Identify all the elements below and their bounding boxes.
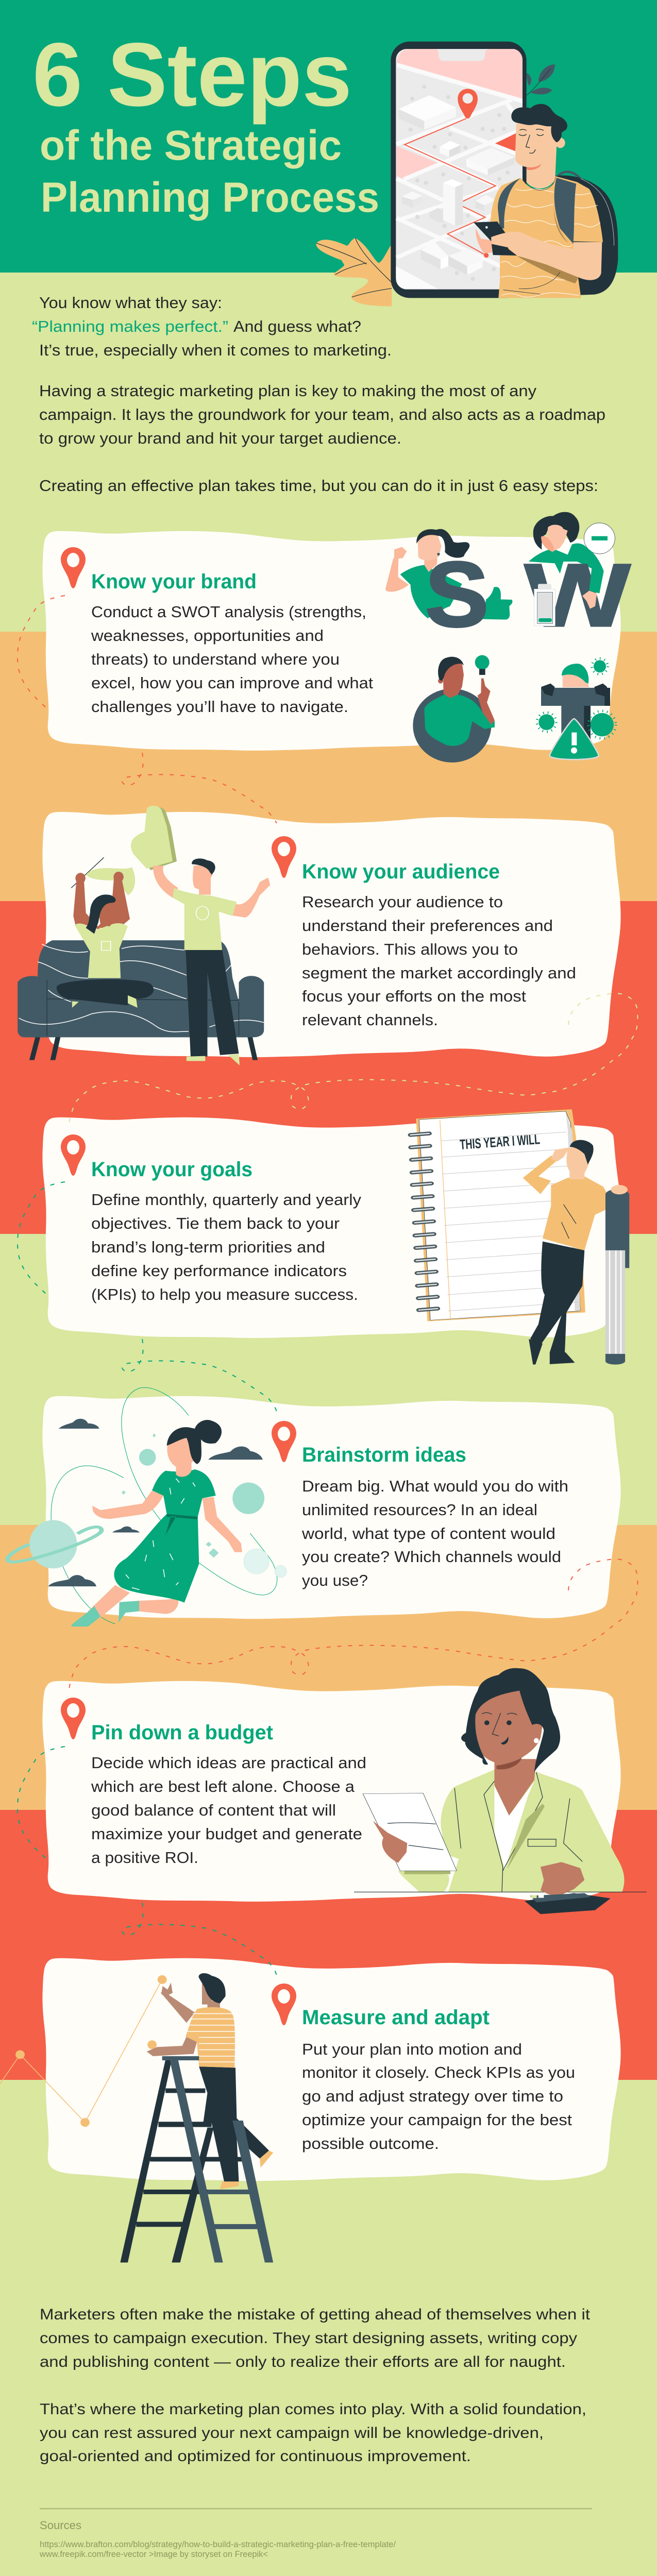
closing text: [40, 2306, 591, 2465]
line chart: [0, 1975, 167, 2127]
icon: map pin: [272, 1421, 296, 1462]
body text: segment the market accordingly and: [302, 964, 576, 982]
man with backpack: [474, 104, 618, 298]
S: strengths: S: [425, 543, 488, 646]
man: [147, 1973, 273, 2189]
body text: weaknesses, opportunities and: [91, 626, 324, 645]
orbits: [51, 1387, 277, 1624]
panel: know your audience: [18, 806, 621, 1065]
heading: Brainstorm ideas: [302, 1444, 466, 1466]
icon: map pin: [61, 547, 86, 588]
sources: www.freepik.com/free-vector >Image by storyset on Freepik<: [39, 2550, 268, 2559]
W: weaknesses: W: [524, 545, 631, 645]
woman's head and hair: [461, 1668, 560, 1816]
body text: Research your audience to: [302, 893, 503, 911]
intro text: to grow your brand and hit your target audience.: [39, 429, 401, 447]
intro text: “Planning makes perfect.”: [32, 317, 228, 335]
man in yellow sweater: [523, 1140, 614, 1364]
icon: map pin: [61, 1698, 86, 1739]
intro text: You know what they say:: [39, 294, 222, 312]
illustration: SWOT letters with people: [385, 512, 631, 762]
closing text: Marketers often make the mistake of getting ahead of themselves when it: [40, 2306, 591, 2323]
icon: map pin: [272, 836, 296, 878]
dashed route: card 4 to card 5: [69, 1559, 637, 1689]
paper in hand: [363, 1793, 457, 1874]
planets and bubbles: [8, 1433, 287, 1578]
illustration: woman with paper and calculator: [354, 1668, 647, 1914]
body text: behaviors. This allows you to: [302, 940, 518, 958]
dashed route: card 3 to card 4: [122, 1339, 277, 1412]
body text: focus your efforts on the most: [302, 987, 526, 1005]
T: threats: [537, 658, 616, 759]
O: opportunities: [413, 655, 495, 762]
icon: phone: [391, 42, 527, 298]
W: weaknesses: [524, 512, 631, 645]
intro text: Having a strategic marketing plan is key to making the most of any: [39, 382, 537, 400]
card background: [42, 1958, 621, 2181]
body text: understand their preferences and: [302, 917, 553, 935]
title: 6 Steps: [32, 25, 352, 125]
body text: [91, 1754, 366, 1867]
panel: know your brand: [42, 512, 631, 762]
heading: Pin down a budget: [91, 1721, 273, 1744]
body text: relevant channels.: [302, 1011, 438, 1029]
jacket and shirt: [398, 1770, 625, 1892]
heading: Measure and adapt: [302, 2006, 490, 2029]
illustration: woman floating in space: [8, 1387, 287, 1626]
heading: Know your goals: [91, 1158, 252, 1181]
heading: Know your audience: [302, 860, 500, 883]
notebook heading text: THIS YEAR I WILL: [459, 1131, 541, 1153]
notebook: [411, 1109, 585, 1321]
body text: unlimited resources? In an ideal: [302, 1501, 537, 1519]
panel: pin down a budget: [42, 1668, 647, 1914]
title: of the Strategic: [40, 122, 342, 169]
closing text: That’s where the marketing plan comes into play. With a solid foundation,: [40, 2401, 586, 2418]
dashed route: card 1 left: [18, 596, 65, 710]
man with foam finger: [131, 806, 270, 1065]
body text: [91, 603, 373, 716]
card background: [42, 1396, 621, 1619]
body text: Put your plan into motion and: [302, 2040, 522, 2058]
body text: Dream big. What would you do with: [302, 1477, 568, 1495]
hand, desk line and calculator: [354, 1862, 647, 1914]
body text: which are best left alone. Choose a: [91, 1777, 355, 1795]
body text: world, what type of content would: [301, 1524, 555, 1543]
closing text: you can rest assured your next campaign will be knowledge-driven,: [40, 2425, 544, 2442]
ladder back: [120, 2060, 249, 2262]
body text: you use?: [302, 1571, 368, 1589]
intro text: And guess what?: [233, 317, 361, 335]
body text: go and adjust strategy over time to: [302, 2087, 563, 2105]
dashed route: card 5 left: [18, 1747, 65, 1861]
body text: (KPIs) to help you measure success.: [91, 1285, 358, 1303]
intro text: It’s true, especially when it comes to marketing.: [39, 341, 392, 359]
woman cheering with flag: [57, 857, 154, 1008]
illustration: man on ladder plotting a chart: [0, 1973, 273, 2262]
closing text: and publishing content — only to realize their efforts are all for naught.: [40, 2353, 566, 2370]
body text: Decide which ideas are practical and: [91, 1754, 366, 1772]
sources: https://www.brafton.com/blog/strategy/how-to-build-a-strategic-marketing-plan-a-free-template/: [40, 2540, 396, 2549]
body text: excel, how you can improve and what: [91, 674, 373, 692]
body text: optimize your campaign for the best: [302, 2111, 572, 2129]
panel: measure and adapt: [0, 1958, 621, 2262]
icon: map pin: [272, 1984, 296, 2025]
body text: Conduct a SWOT analysis (strengths,: [91, 603, 366, 621]
sources: [39, 2508, 592, 2559]
body text: [302, 2040, 575, 2153]
icon: orange leaf: [316, 238, 392, 306]
body text: monitor it closely. Check KPIs as you: [302, 2063, 575, 2081]
dashed route: card 1 to card 2: [122, 753, 277, 823]
dashed route: card 2 to card 3: [69, 993, 637, 1123]
card background: [42, 1117, 621, 1338]
icon: red speech triangle: [495, 133, 516, 151]
sources: Sources: [40, 2519, 81, 2532]
card background: [42, 531, 621, 751]
icon: map pin: [61, 1134, 86, 1176]
body text: brand’s long-term priorities and: [91, 1238, 325, 1256]
intro text: Creating an effective plan takes time, but you can do it in just 6 easy steps:: [39, 477, 598, 495]
body text: define key performance indicators: [91, 1262, 347, 1280]
body text: [302, 893, 576, 1029]
icon: map pin: [458, 89, 478, 118]
body text: threats) to understand where you: [91, 650, 340, 668]
dashed route: card 5 to card 6: [122, 1903, 277, 1975]
body text: objectives. Tie them back to your: [91, 1214, 340, 1232]
intro text: [32, 294, 605, 495]
woman in green dress: [71, 1420, 242, 1626]
heading: Know your brand: [91, 570, 257, 593]
card background: [42, 1681, 621, 1902]
title: Planning Process: [41, 174, 379, 221]
sofa: [18, 940, 264, 1060]
route on map: [405, 118, 496, 258]
illustration: notebook, man and pencil: [411, 1109, 629, 1365]
body text: a positive ROI.: [91, 1849, 198, 1867]
illustration: fans on sofa: [18, 806, 270, 1065]
closing text: goal-oriented and optimized for continuous improvement.: [40, 2448, 471, 2465]
body text: possible outcome.: [302, 2134, 439, 2153]
title: [32, 25, 379, 221]
body text: maximize your budget and generate: [91, 1825, 362, 1843]
body text: challenges you’ll have to navigate.: [91, 698, 348, 716]
intro text: campaign. It lays the groundwork for your team, and also acts as a roadmap: [39, 405, 605, 423]
panel: know your goals: [42, 1109, 629, 1365]
ladder front: [162, 2056, 273, 2262]
body text: good balance of content that will: [91, 1801, 336, 1819]
giant pencil: [605, 1185, 629, 1365]
panel: brainstorm ideas: [8, 1387, 621, 1626]
icon: dark leaves: [527, 64, 555, 95]
card background: [42, 812, 621, 1057]
dashed route: card 3 left: [18, 1182, 65, 1297]
clouds: [48, 1419, 263, 1586]
body text: [91, 1191, 362, 1303]
body text: Define monthly, quarterly and yearly: [91, 1191, 362, 1209]
illustration: man with giant phone map: [391, 42, 618, 298]
body text: [301, 1477, 568, 1589]
closing text: comes to campaign execution. They start designing assets, writing copy: [40, 2330, 577, 2347]
body text: you create? Which channels would: [302, 1548, 561, 1566]
S: strengths: [385, 529, 512, 646]
